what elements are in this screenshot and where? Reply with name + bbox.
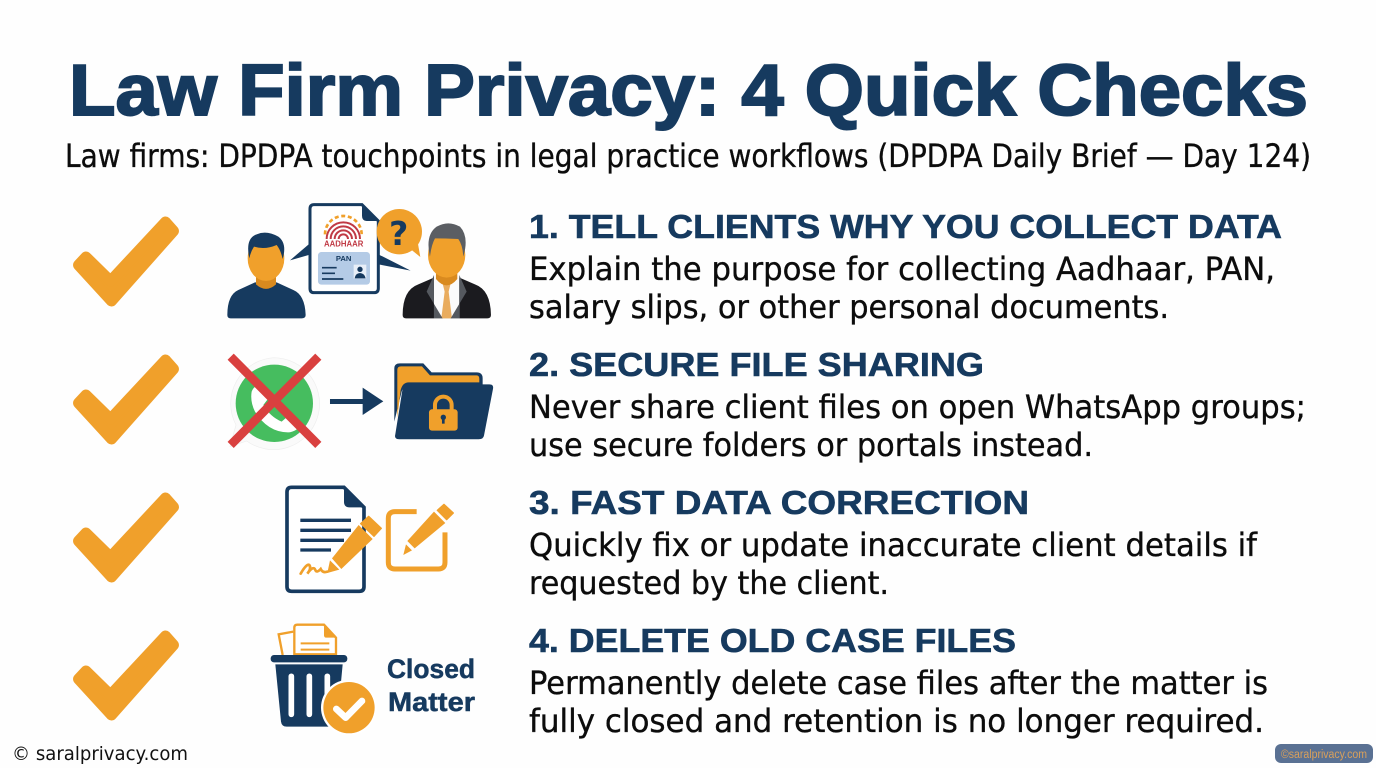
icon: crossed-out WhatsApp to locked folder	[230, 357, 493, 450]
body 2	[529, 388, 1306, 464]
panel: check 4	[78, 623, 1268, 740]
body 4: Permanently delete case files after the matter is	[529, 664, 1268, 702]
label: Closed Matter	[387, 654, 476, 717]
heading 3: 3. FAST DATA CORRECTION	[529, 485, 1029, 522]
icon: orange check mark 3	[78, 498, 174, 577]
heading 1: 1. TELL CLIENTS WHY YOU COLLECT DATA	[529, 209, 1282, 246]
icon: orange check mark 2	[78, 360, 174, 439]
body 2: use secure folders or portals instead.	[529, 426, 1093, 464]
icon: client and lawyer exchanging Aadhaar and PAN documents: PAN	[336, 254, 352, 263]
heading 2: 2. SECURE FILE SHARING	[529, 347, 984, 384]
watermark badge	[1275, 744, 1373, 763]
icon: document with pen and edit box	[287, 487, 453, 591]
icon: client and lawyer exchanging Aadhaar and PAN documents	[227, 205, 491, 318]
body 1: Explain the purpose for collecting Aadhaar, PAN,	[529, 250, 1275, 288]
body 4: fully closed and retention is no longer required.	[529, 702, 1264, 740]
panel: check 1	[78, 205, 1282, 326]
label: Closed Matter: Closed	[387, 654, 475, 684]
icon: client and lawyer exchanging Aadhaar and PAN documents: ?	[389, 214, 408, 253]
icon: orange check mark 1	[78, 222, 174, 301]
body 1	[529, 250, 1275, 326]
icon: orange check mark 4	[78, 636, 174, 715]
body 3: requested by the client.	[529, 564, 889, 602]
body 1: salary slips, or other personal documents.	[529, 288, 1169, 326]
body 3: Quickly fix or update inaccurate client details if	[529, 526, 1258, 564]
watermark badge: ©saralprivacy.com	[1281, 749, 1367, 761]
icon: client and lawyer exchanging Aadhaar and PAN documents: AADHAAR	[324, 238, 363, 248]
heading 4: 4. DELETE OLD CASE FILES	[529, 623, 1016, 660]
footer copyright: © saralprivacy.com	[12, 743, 188, 765]
panel: check 3	[78, 485, 1258, 602]
body 2: Never share client files on open WhatsApp groups;	[529, 388, 1306, 426]
label: Closed Matter: Matter	[388, 687, 476, 717]
panel: check 2	[78, 347, 1306, 464]
title: Law Firm Privacy: 4 Quick Checks	[69, 51, 1308, 131]
body 3	[529, 526, 1258, 602]
icon: bin of files with check badge	[271, 625, 377, 736]
body 4	[529, 664, 1268, 740]
